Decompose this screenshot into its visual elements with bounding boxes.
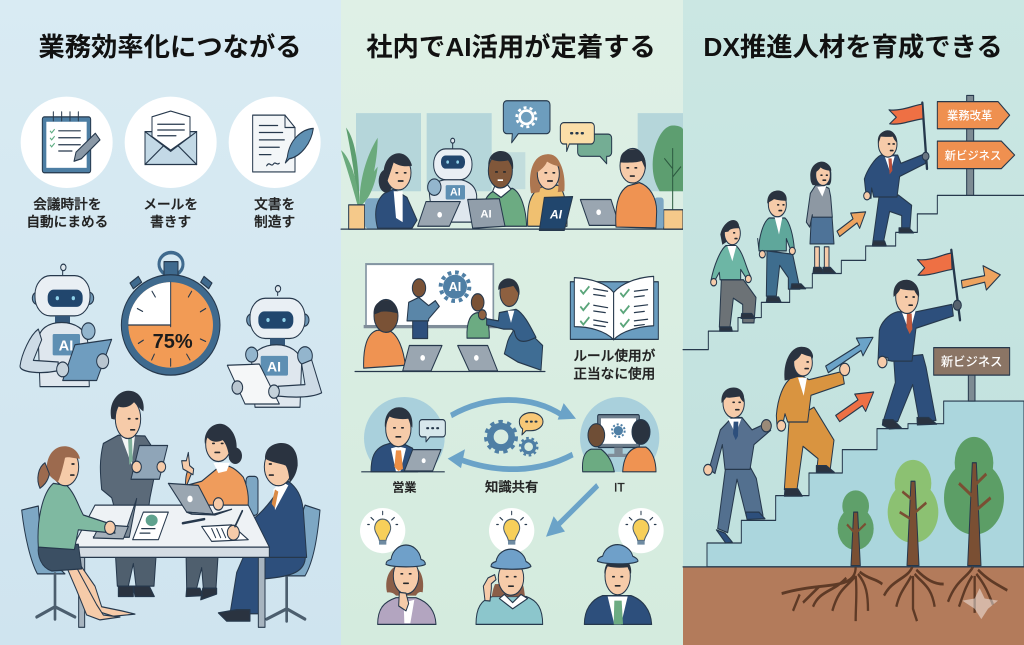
woman in yellow: AI	[549, 207, 563, 221]
heading: 社内でAI活用が定着する: 社内でAI活用が定着する	[366, 32, 656, 62]
panel: 業務効率化	[0, 0, 341, 645]
panel: DX推進人材を育成できる	[683, 0, 1024, 645]
arrow: orange top	[837, 212, 866, 237]
worker: woman in purple	[378, 545, 436, 624]
robot with paper	[227, 285, 322, 407]
icon: meeting notes in circle	[21, 97, 113, 188]
woman in green	[38, 446, 135, 620]
stopwatch 75%	[121, 253, 220, 375]
watermark	[962, 588, 998, 619]
arrow: blue	[826, 337, 873, 373]
panel: 社内でAI活用が定着する	[341, 0, 683, 645]
trees with roots	[782, 437, 1007, 621]
presenter	[407, 279, 439, 339]
tree	[653, 125, 683, 229]
signpost: 業務改革 / 新ビジネス: 新ビジネス	[945, 150, 1001, 163]
label: 知識共有: 知識共有	[485, 479, 538, 495]
icon: gears with speech bubble	[486, 413, 543, 455]
label: ルール使用が正当なに使用: ルール使用が	[573, 348, 655, 363]
woman in orange	[182, 424, 248, 600]
label: 文書を制造す: 文書を	[254, 197, 295, 212]
whiteboard	[364, 264, 497, 328]
signpost: 業務改革 / 新ビジネス	[937, 95, 1015, 195]
label: 営業: 営業	[392, 480, 416, 495]
sign: 新ビジネス	[934, 348, 1010, 401]
training scene	[355, 264, 545, 371]
student in orange	[364, 299, 405, 368]
robot with tablet: AI	[59, 338, 73, 354]
laptops	[403, 346, 498, 371]
tablet with AI: AI	[480, 209, 492, 221]
robot with tablet	[20, 264, 112, 387]
ground	[683, 567, 1024, 645]
worker: man in navy	[584, 545, 652, 624]
sign: 新ビジネス: 新ビジネス	[941, 354, 1002, 369]
man in green	[481, 151, 527, 226]
instructor	[478, 278, 543, 370]
arrows between departments	[448, 400, 576, 469]
laptops	[418, 200, 619, 226]
icon: rule book	[570, 276, 658, 340]
robot with paper: AI	[267, 358, 281, 374]
stopwatch 75%: 75%	[153, 331, 193, 353]
label: IT: IT	[614, 481, 625, 495]
idea bubble 1	[360, 508, 405, 553]
man in orange	[616, 148, 664, 229]
standing man	[100, 391, 168, 596]
upper staircase	[683, 195, 1024, 350]
woman in navy	[365, 153, 417, 229]
icon: AI gear	[441, 272, 469, 301]
office team scene	[341, 101, 683, 230]
seated listener in green	[467, 294, 489, 338]
man in navy	[218, 443, 307, 621]
leader with flag (large)	[878, 250, 961, 429]
woman in orange suit	[776, 347, 850, 496]
idea bubble 2	[489, 508, 534, 553]
arrow: red-orange	[836, 392, 874, 422]
speech bubbles	[503, 101, 612, 164]
woman in gray	[806, 162, 836, 273]
heading: 業務効率化につながる: 業務効率化につながる	[38, 32, 302, 62]
plant	[341, 128, 378, 229]
idea bubble 3	[618, 508, 664, 553]
label: メールを書きす: メールを	[143, 197, 198, 212]
label: 文書を制造す: 制造す	[254, 214, 295, 229]
signpost: 業務改革 / 新ビジネス: 業務改革	[947, 109, 992, 123]
woman in yellow	[528, 154, 573, 230]
icon: document and quill in circle	[229, 97, 321, 188]
man in teal jacket	[758, 190, 806, 302]
sales person	[362, 397, 445, 479]
icon: envelope in circle	[125, 97, 217, 188]
IT team at monitor	[580, 397, 659, 479]
heading: DX推進人材を育成できる: DX推進人材を育成できる	[703, 32, 1003, 62]
tablet with AI	[468, 199, 505, 228]
robot: AI	[450, 186, 461, 198]
label: メールを書きす: 書きす	[150, 214, 191, 229]
robot	[428, 138, 477, 222]
lower staircase	[707, 401, 1024, 567]
leader with flag (top)	[864, 103, 929, 246]
label: 会議時計を自動にまめる: 会議時計を	[33, 197, 101, 212]
meeting scene	[22, 391, 320, 627]
label: ルール使用が正当なに使用: 正当なに使用	[573, 367, 655, 382]
icon: AI gear: AI	[449, 280, 461, 294]
woman in teal jacket	[711, 220, 756, 331]
label: 会議時計を自動にまめる: 自動にまめる	[26, 214, 108, 229]
table	[73, 483, 269, 627]
man in gray-blue suit	[704, 387, 771, 543]
worker: woman in teal	[476, 549, 543, 624]
chairs	[22, 476, 320, 621]
arrow to employees	[546, 485, 598, 537]
arrow: orange right	[961, 266, 1000, 290]
